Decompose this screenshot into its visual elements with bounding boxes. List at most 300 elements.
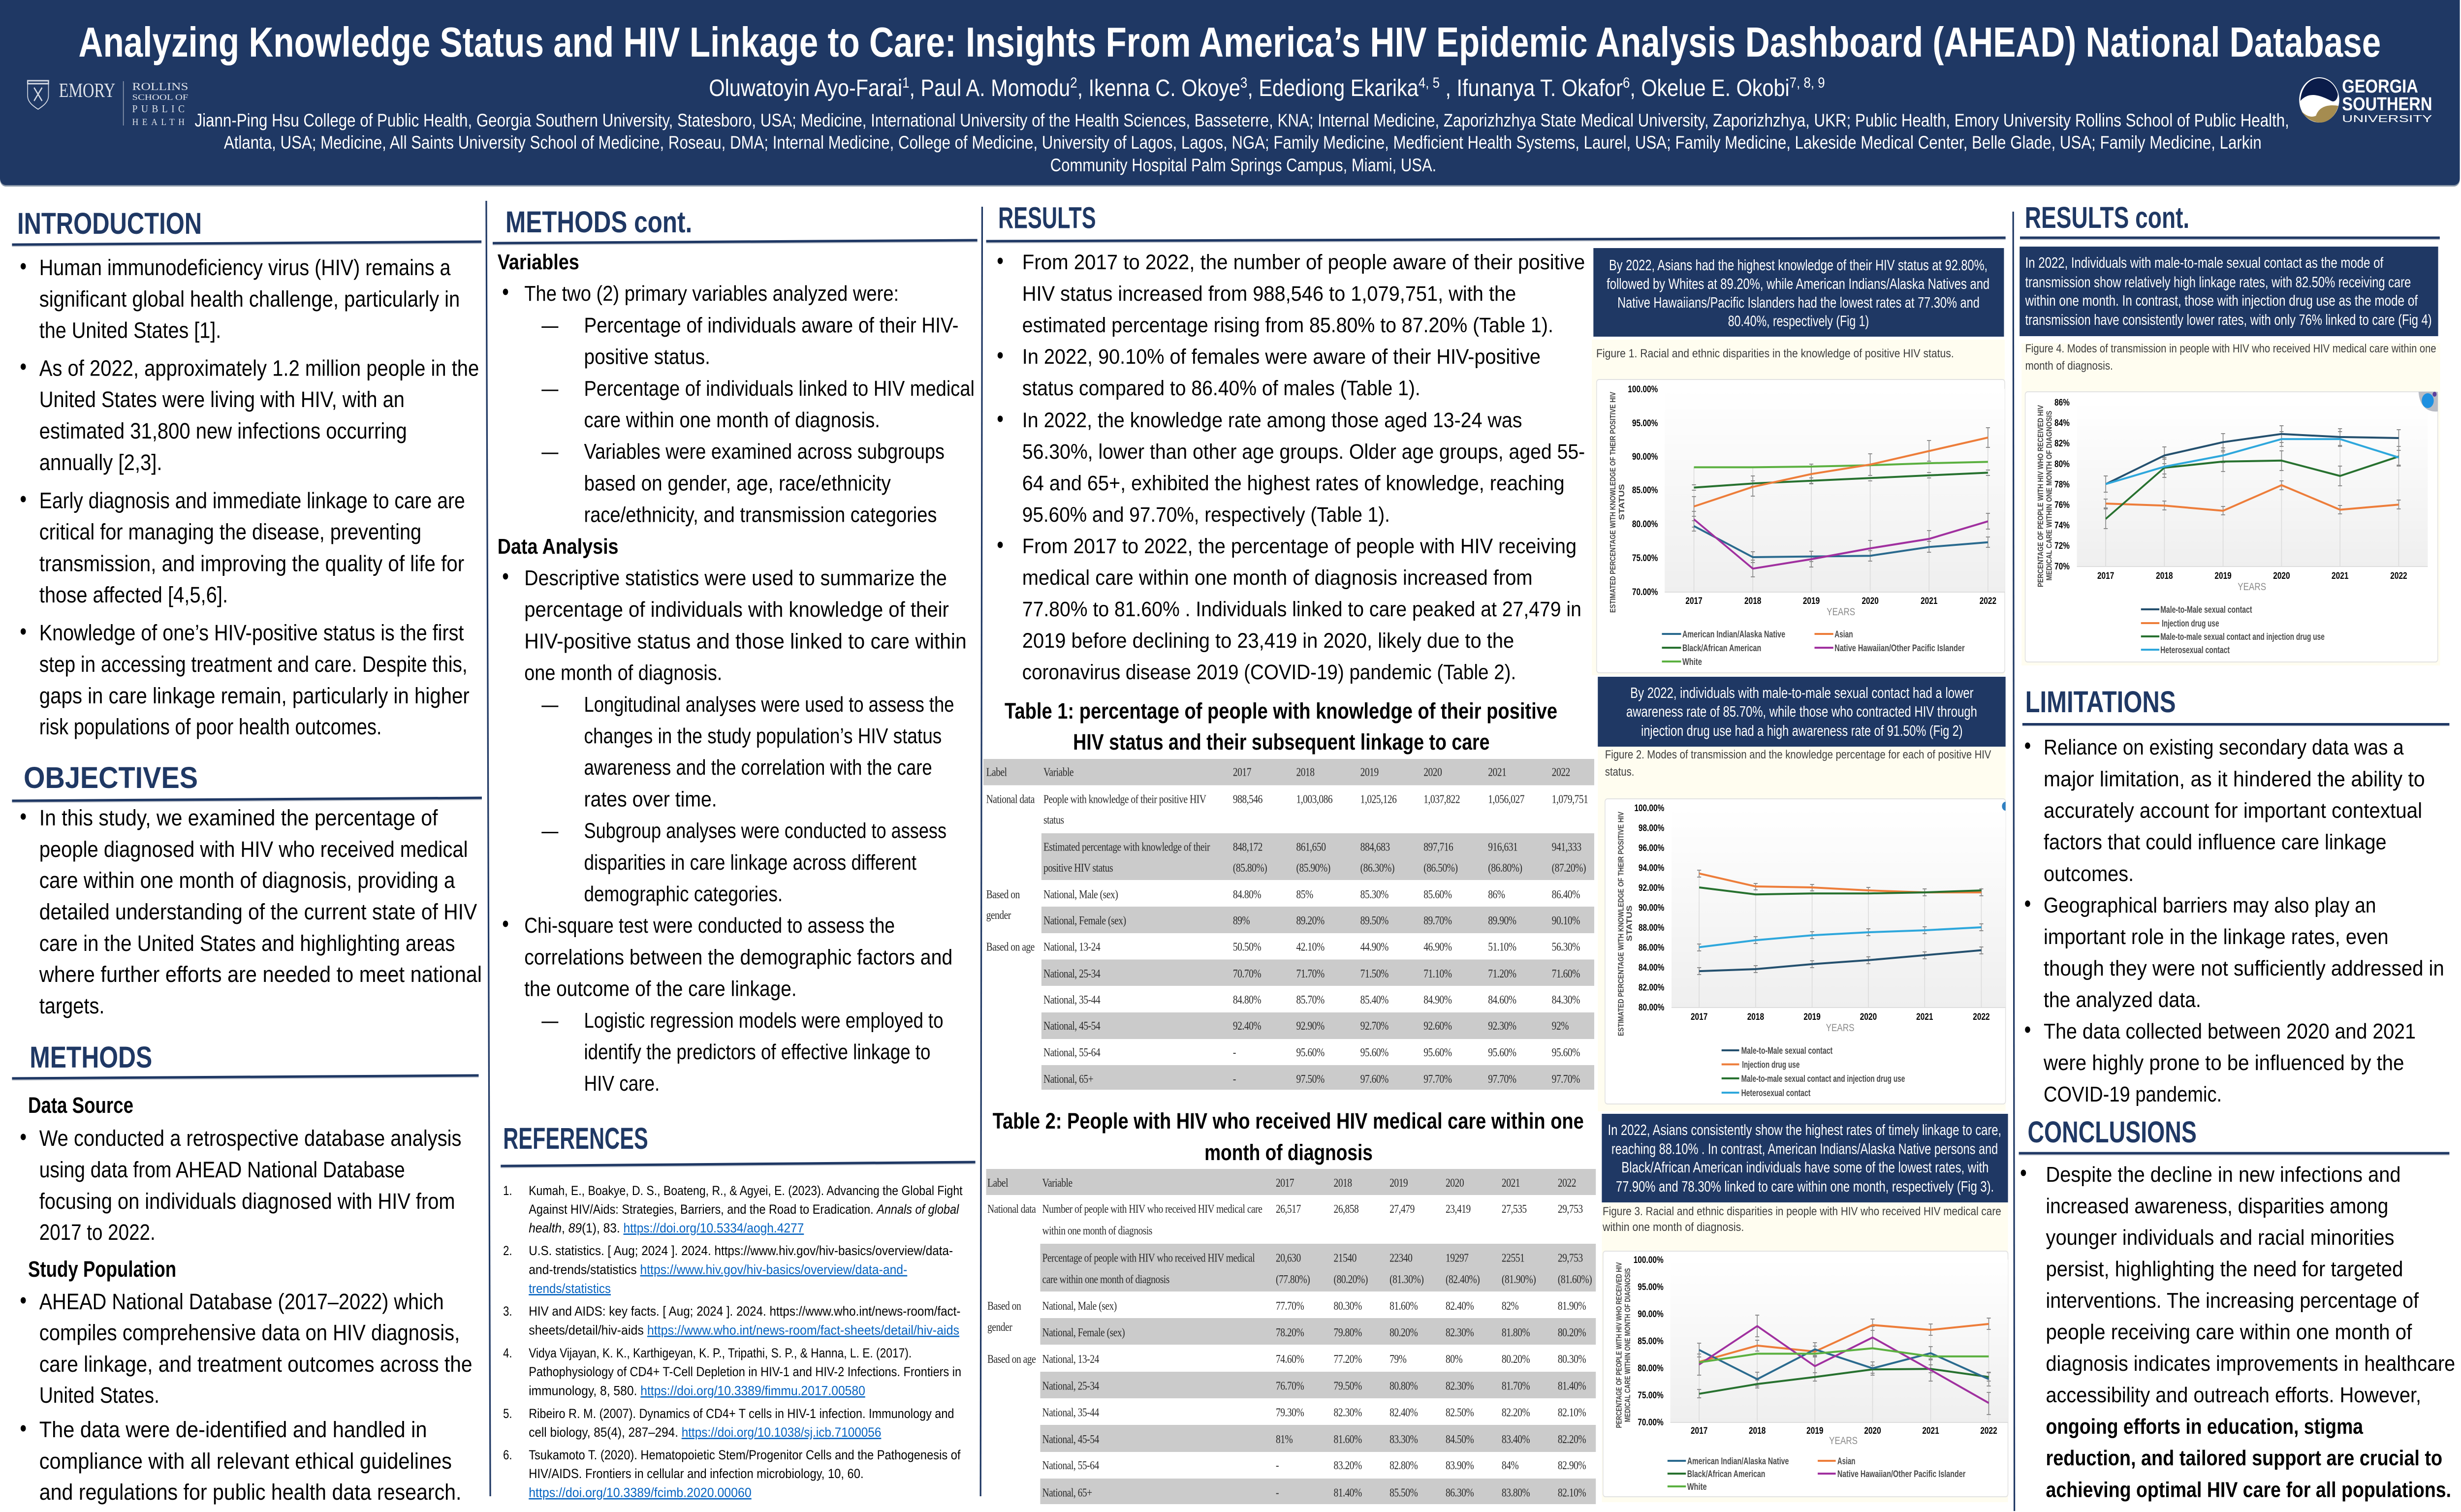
table 2: National, 45-54: [1042, 1433, 1099, 1446]
table 1: 56.30%: [1552, 941, 1580, 953]
table 1: 861,650: [1296, 841, 1326, 853]
title: Analyzing Knowledge Status and HIV Linkage to Care: Insights From America’s HIV Epidemic Analysis Dashboard (AHEAD) National Database: [79, 19, 2381, 66]
heading: introduction: INTRODUCTION: [17, 207, 202, 240]
icon: blue marker: [2002, 802, 2006, 811]
table 2: 74.60%: [1276, 1353, 1304, 1365]
line chart: figure 1: 90.00%: [1632, 451, 1658, 462]
text: reference list: cell biology, 85(4), 287–294. https://doi.org/10.1038/sj.icb.7100056: [529, 1425, 881, 1440]
table 2 title: [993, 1108, 1584, 1165]
line chart: figure 1: 70.00%: [1632, 586, 1658, 597]
text: introduction bullets: those affected [4,5,6].: [39, 582, 228, 607]
panel: limitations: [2022, 685, 2449, 1106]
table 1: status: [1043, 814, 1064, 826]
line chart: figure 3: [1614, 1254, 2008, 1447]
table 2: 81%: [1276, 1433, 1293, 1446]
table 1: 84.30%: [1552, 993, 1580, 1006]
line chart: figure 1: 75.00%: [1632, 552, 1658, 563]
text: data source: [21, 1093, 461, 1245]
text: limitations bullets: outcomes.: [2044, 862, 2134, 886]
authors: Oluwatoyin Ayo-Farai: [709, 75, 891, 101]
table 1: 89%: [1233, 914, 1250, 927]
table 2: (77.80%): [1276, 1273, 1310, 1286]
text: data analysis: –: [541, 1008, 559, 1033]
text: reference list: Kumah, E., Boakye, D. S., Boateng, R., & Agyei, E. (2023). Advancing the Global Fight: [529, 1184, 963, 1198]
table 1: 86%: [1488, 888, 1505, 901]
table 2: 2021: [1502, 1176, 1520, 1189]
legend: figure 3: Native Hawaiian/Other Pacific Islander: [1837, 1468, 1966, 1479]
table 2: 2019: [1389, 1176, 1408, 1189]
text: results bullets: 64 and 65+, exhibited the highest rates of knowledge, reaching: [1022, 472, 1565, 495]
text: reference list: trends/statistics: [529, 1282, 611, 1296]
legend: figure 3: Asian: [1837, 1455, 1856, 1466]
table 1: National data: [986, 793, 1035, 806]
line chart: figure 2: YEARS: [1826, 1022, 1855, 1034]
line chart: figure 2: 84.00%: [1639, 962, 1664, 973]
table 2 title: month of diagnosis: [1204, 1140, 1373, 1165]
text: study population: United States.: [39, 1383, 159, 1408]
text: limitations bullets: Reliance on existing secondary data was a: [2044, 736, 2404, 759]
legend: figure 2: Injection drug use: [1742, 1059, 1800, 1070]
text: reference list: sheets/detail/hiv-aids https://www.who.int/news-room/fact-sheets/detail/hiv-aids: [529, 1323, 959, 1338]
table 1: 84.80%: [1233, 888, 1261, 901]
logo: Georgia Southern University: GEORGIA: [2342, 76, 2418, 97]
callout: figure 1 finding: followed by Whites at 89.20%, while American Indians/Alaska Natives and: [1607, 275, 1989, 292]
table 2: 80.30%: [1334, 1299, 1362, 1312]
table 2: 2017: [1276, 1176, 1294, 1189]
callout: figure 2 finding: By 2022, individuals with male-to-male sexual contact had a lower: [1630, 684, 1974, 701]
table 2: Based on: [987, 1299, 1021, 1312]
text: data analysis: [498, 535, 967, 1096]
text: study population: compliance with all relevant ethical guidelines: [39, 1449, 452, 1474]
text: reference list: [503, 1184, 963, 1500]
callout: figure 3 finding: [1602, 1114, 2008, 1202]
legend: figure 2: Male-to-Male sexual contact: [1741, 1045, 1832, 1056]
caption: figure 3: within one month of diagnosis.: [1602, 1220, 1744, 1233]
table 1: [983, 759, 1594, 1090]
table 1: 50.50%: [1233, 941, 1261, 953]
text: data analysis: disparities in care linkage across different: [584, 850, 916, 875]
line chart: figure 2: 92.00%: [1639, 882, 1664, 893]
table 2: 29,753: [1558, 1252, 1583, 1264]
caption: figure 2: Figure 2. Modes of transmission and the knowledge percentage for each of positive HIV: [1605, 748, 1991, 761]
table 1: 85.70%: [1296, 993, 1325, 1006]
line chart: figure 1: YEARS: [1827, 606, 1855, 618]
text: results bullets: estimated percentage rising from 85.80% to 87.20% (Table 1).: [1022, 314, 1553, 337]
line chart: figure 3: 70.00%: [1638, 1417, 1664, 1427]
line chart: figure 4: 2021: [2332, 570, 2349, 581]
text: limitations bullets: [2025, 736, 2444, 1106]
table 2: 27,479: [1389, 1202, 1415, 1215]
table 2 title: Table 2: People with HIV who received HIV medical care within one: [993, 1108, 1584, 1134]
table 1: 84.60%: [1488, 993, 1516, 1006]
table 1: 71.10%: [1423, 967, 1452, 980]
text: introduction bullets: step in accessing treatment and care. Despite this,: [39, 652, 468, 677]
line chart: figure 3: YEARS: [1829, 1435, 1858, 1447]
callout: figure 4 finding: In 2022, Individuals with male-to-male sexual contact as the mode of: [2025, 254, 2384, 271]
text: data analysis: percentage of individuals with knowledge of their: [524, 598, 949, 622]
text: reference list: 2.: [503, 1244, 512, 1259]
line chart: figure 4: [2036, 397, 2428, 593]
line chart: figure 3: PERCENTAGE OF PEOPLE WITH HIV WHO RECEIVED HIV: [1614, 1262, 1623, 1428]
table 1: 95.60%: [1552, 1046, 1580, 1059]
affiliations: [195, 110, 2289, 176]
table 2: 83.80%: [1502, 1486, 1530, 1499]
table 2: 82.50%: [1446, 1406, 1474, 1419]
table 2: 79.30%: [1276, 1406, 1304, 1419]
table 1: 89.20%: [1296, 914, 1325, 927]
text: reference list: 3.: [503, 1304, 512, 1319]
table 1: National, Male (sex): [1043, 888, 1118, 901]
line chart: figure 2: 94.00%: [1639, 862, 1664, 873]
table 2: 84%: [1502, 1459, 1519, 1472]
authors: 1: [902, 74, 909, 91]
callout: figure 2 finding: [1598, 677, 2006, 747]
line chart: figure 3: 2021: [1922, 1425, 1939, 1436]
table 1: 916,631: [1488, 841, 1517, 853]
line chart: figure 2: 2019: [1803, 1011, 1821, 1022]
table 2: 22551: [1502, 1252, 1524, 1264]
table 1: (86.50%): [1423, 861, 1458, 874]
table 2: 80.20%: [1558, 1326, 1586, 1339]
table 2: 80%: [1446, 1353, 1463, 1365]
text: variables: Variables: [498, 251, 579, 274]
text: limitations bullets: Geographical barriers may also play an: [2044, 894, 2376, 917]
panel: references: [501, 1122, 976, 1500]
legend: figure 2: Male-to-male sexual contact and injection drug use: [1741, 1073, 1905, 1084]
table 2: 82.30%: [1446, 1380, 1474, 1392]
table 1: 2018: [1296, 766, 1315, 779]
table 2: 83.20%: [1334, 1459, 1362, 1472]
table 2: 82.30%: [1334, 1406, 1362, 1419]
table 1: positive HIV status: [1043, 861, 1113, 874]
line chart: figure 1: 2020: [1862, 595, 1879, 606]
logo: Emory Rollins School of Public Health: HEALTH: [132, 117, 188, 127]
logo: Emory Rollins School of Public Health: EMORY: [59, 80, 115, 102]
authors: 4, 5: [1419, 74, 1440, 91]
text: objectives bullet: care within one month of diagnosis, providing a: [39, 868, 455, 893]
authors: , Ikenna C. Okoye: [1077, 75, 1240, 101]
table 2: 80.20%: [1502, 1353, 1530, 1365]
text: data analysis: Descriptive statistics were used to summarize the: [524, 567, 947, 590]
callout: figure 3 finding: In 2022, Asians consistently show the highest rates of timely linkage to care,: [1608, 1121, 2001, 1138]
text: data analysis: Chi-square test were conducted to assess the: [524, 914, 895, 938]
table 1: 92.90%: [1296, 1019, 1325, 1032]
text: results bullets: coronavirus disease 2019 (COVID-19) pandemic (Table 2).: [1022, 661, 1516, 684]
text: reference list: health , 89(1), 83. https://doi.org/10.5334/aogh.4277: [529, 1221, 804, 1236]
caption: figure 1: Figure 1. Racial and ethnic disparities in the knowledge of positive HIV status.: [1596, 346, 1954, 360]
text: reference list: Tsukamoto T. (2020). Hematopoietic Stem/Progenitor Cells and the Pathogenesis of: [529, 1448, 961, 1463]
legend: figure 2: [1722, 1045, 1905, 1098]
table 2: care within one month of diagnosis: [1042, 1273, 1169, 1286]
text: limitations bullets: were highly prone to be influenced by the: [2043, 1051, 2404, 1075]
table 1: 2019: [1360, 766, 1379, 779]
panel: conclusions: [2019, 1115, 2455, 1502]
text: objectives bullet: where further efforts are needed to meet national: [39, 962, 482, 987]
text: conclusions bullet: diagnosis indicates improvements in healthcare: [2046, 1352, 2455, 1376]
table 2: National, 25-34: [1042, 1380, 1099, 1392]
table 1: (87.20%): [1552, 861, 1586, 874]
table 1: 848,172: [1233, 841, 1262, 853]
table 2: gender: [987, 1321, 1012, 1333]
heading: results cont.: RESULTS cont.: [2025, 201, 2189, 234]
panel: figure 3: [1602, 1202, 2008, 1502]
rule: results cont.: [2020, 238, 2440, 239]
panel: introduction: [12, 207, 481, 739]
panel: methods: [12, 1040, 478, 1505]
text: data analysis: Logistic regression models were employed to: [584, 1008, 944, 1033]
text: variables: –: [541, 314, 559, 337]
table 2: 21540: [1334, 1252, 1357, 1264]
table 2: (81.90%): [1502, 1273, 1536, 1286]
text: results bullets: From 2017 to 2022, the percentage of people with HIV receiving: [1022, 535, 1577, 558]
table 1: 71.50%: [1360, 967, 1388, 980]
table 1: National, 45-54: [1043, 1019, 1101, 1032]
table 1: 46.90%: [1423, 941, 1452, 953]
legend: figure 2: Heterosexual contact: [1741, 1087, 1811, 1098]
text: results bullets: 56.30%, lower than other age groups. Older age groups, aged 55-: [1022, 441, 1585, 464]
table 2: -: [1276, 1486, 1279, 1499]
logo: Emory Rollins School of Public Health: [28, 80, 189, 127]
table 1: 1,056,027: [1488, 793, 1525, 806]
text: reference list: 4.: [503, 1346, 512, 1361]
line chart: figure 1: 95.00%: [1632, 417, 1658, 428]
table 1: 97.70%: [1488, 1072, 1516, 1085]
text: variables: The two (2) primary variables analyzed were:: [524, 282, 899, 306]
table 2: 2018: [1334, 1176, 1352, 1189]
text: conclusions bullet: increased awareness, disparities among: [2046, 1195, 2388, 1218]
table 1: 90.10%: [1552, 914, 1580, 927]
table 1: gender: [986, 909, 1011, 921]
table 2: 79%: [1389, 1353, 1407, 1365]
table 2: 20,630: [1276, 1252, 1301, 1264]
line chart: figure 3: 90.00%: [1638, 1308, 1664, 1319]
authors: , Paul A. Momodu: [909, 75, 1070, 101]
table 1 title: Table 1: percentage of people with knowledge of their positive: [1005, 698, 1557, 724]
table 2: -: [1276, 1459, 1279, 1472]
table 1: National, 65+: [1043, 1072, 1093, 1085]
table 2: National, 13-24: [1042, 1353, 1099, 1365]
line chart: figure 2: ESTIMATED PERCENTAGE WITH KNOWLEDGE OF THEIR POSITIVE HIV: [1616, 812, 1625, 1036]
text: introduction bullets: transmission, and improving the quality of life for: [39, 551, 464, 576]
line chart: figure 4: 2017: [2097, 570, 2114, 581]
table 1: 89.70%: [1423, 914, 1452, 927]
table 2: 27,535: [1502, 1202, 1527, 1215]
text: objectives bullet: people diagnosed with HIV who received medical: [39, 837, 468, 862]
legend: figure 4: [2141, 604, 2325, 655]
table 1: 84.80%: [1233, 993, 1261, 1006]
table 1: 884,683: [1360, 841, 1390, 853]
line chart: figure 2: 80.00%: [1639, 1002, 1664, 1012]
text: conclusions bullet: people receiving care within one month of: [2046, 1321, 2412, 1344]
table 1: 92%: [1552, 1019, 1569, 1032]
logo: Emory Rollins School of Public Health: ROLLINS: [132, 81, 188, 93]
text: reference list: Ribeiro R. M. (2007). Dynamics of CD4+ T cells in HIV-1 infection. Immunology and: [529, 1407, 954, 1421]
table 2: 82.40%: [1446, 1299, 1474, 1312]
text: results bullets: HIV status increased from 988,546 to 1,079,751, with the: [1022, 283, 1516, 306]
table 2: Based on age: [987, 1353, 1036, 1365]
text: results bullets: status compared to 86.40% of males (Table 1).: [1022, 377, 1420, 400]
line chart: figure 1: 2019: [1803, 595, 1820, 606]
table 2: Variable: [1042, 1176, 1073, 1189]
table 2: within one month of diagnosis: [1042, 1224, 1152, 1237]
line chart: figure 2: 2020: [1860, 1011, 1877, 1022]
caption: figure 4: month of diagnosis.: [2025, 359, 2113, 373]
table 2: 81.70%: [1502, 1380, 1530, 1392]
line chart: figure 1: 2018: [1744, 595, 1762, 606]
line chart: figure 2: 2021: [1916, 1011, 1933, 1022]
heading: methods: METHODS: [30, 1040, 152, 1074]
table 1: 89.90%: [1488, 914, 1516, 927]
table 2: 22340: [1389, 1252, 1413, 1264]
authors: 6: [1623, 74, 1630, 91]
table 2: (81.30%): [1389, 1273, 1424, 1286]
table 2: 80.20%: [1389, 1326, 1418, 1339]
text: variables: [498, 251, 975, 527]
text: variables: based on gender, age, race/ethnicity: [584, 472, 891, 495]
line chart: figure 1: ESTIMATED PERCENTAGE WITH KNOWLEDGE OF THEIR POSITIVE HIV: [1609, 392, 1617, 613]
affiliations: Jiann-Ping Hsu College of Public Health, Georgia Southern University, Statesboro, USA; Medicine, International University of the Health Sciences, Basseterre, KNA; Internal Medicine, Zaporizhzhya State Medical University, Zaporizhzhya, UKR; Public Health, Emory University Rollins School of Public Health,: [195, 110, 2289, 131]
legend: figure 1: White: [1682, 656, 1702, 667]
table 1: 92.70%: [1360, 1019, 1388, 1032]
line chart: figure 1: 2022: [1980, 595, 1996, 606]
table 2: 82.30%: [1446, 1326, 1474, 1339]
text: data analysis: demographic categories.: [584, 882, 783, 906]
line chart: figure 4: PERCENTAGE OF PEOPLE WITH HIV WHO RECEIVED HIV: [2036, 405, 2045, 587]
text: reference list: Against HIV/Aids: Strategies, Barriers, and the Road to Eradication. Annals of global: [529, 1202, 960, 1217]
text: limitations bullets: the analyzed data.: [2044, 988, 2201, 1012]
table 2: 81.80%: [1502, 1326, 1530, 1339]
table 1: 44.90%: [1360, 941, 1388, 953]
text: variables: Percentage of individuals aware of their HIV-: [584, 314, 958, 337]
table 2: Number of people with HIV who received HIV medical care: [1042, 1202, 1262, 1215]
text: data source: We conducted a retrospective database analysis: [39, 1126, 462, 1151]
text: limitations bullets: though they were not sufficiently addressed in: [2044, 957, 2444, 980]
table 2: 79.80%: [1334, 1326, 1362, 1339]
text: variables: Variables were examined across subgroups: [584, 440, 945, 464]
text: variables: –: [541, 440, 559, 464]
table 1: 95.60%: [1423, 1046, 1452, 1059]
table 1: National, 25-34: [1043, 967, 1101, 980]
callout: figure 2 finding: injection drug use had a high awareness rate of 91.50% (Fig 2): [1641, 722, 1963, 739]
text: objectives bullet: detailed understanding of the current state of HIV: [39, 899, 477, 924]
legend: figure 1: Black/African American: [1682, 642, 1761, 653]
table 1: 85%: [1296, 888, 1313, 901]
text: reference list: 6.: [503, 1448, 512, 1463]
table 2: Percentage of people with HIV who received HIV medical: [1042, 1252, 1255, 1264]
line chart: figure 4: 80%: [2054, 458, 2070, 469]
table 1: 84.90%: [1423, 993, 1452, 1006]
table 2: 82.40%: [1389, 1406, 1418, 1419]
text: variables: race/ethnicity, and transmission categories: [584, 503, 937, 527]
text: reference list: Vidya Vijayan, K. K., Karthigeyan, K. P., Tripathi, S. P., & Hanna, L. E. (2017).: [529, 1346, 912, 1361]
callout: figure 1 finding: By 2022, Asians had the highest knowledge of their HIV status at 92.80%,: [1609, 256, 1988, 274]
header banner: [0, 0, 2460, 187]
callout: figure 3 finding: 77.90% and 78.30% linked to care within one month, respectively (Fig 3).: [1616, 1177, 1994, 1195]
text: objectives bullet: [21, 805, 482, 1018]
text: reference list: HIV/AIDS. Frontiers in cellular and infection microbiology, 10, 60.: [529, 1467, 864, 1481]
table 2: 79.50%: [1334, 1380, 1362, 1392]
text: data analysis: Data Analysis: [498, 535, 619, 559]
table 2: 82.80%: [1389, 1459, 1418, 1472]
legend: figure 3: American Indian/Alaska Native: [1687, 1455, 1789, 1466]
text: variables: –: [541, 377, 559, 401]
table 2: 82.90%: [1558, 1459, 1586, 1472]
table 2: 23,419: [1446, 1202, 1471, 1215]
table 1: 95.60%: [1296, 1046, 1325, 1059]
authors: , Edediong Ekarika: [1247, 75, 1419, 101]
table 1: 97.70%: [1552, 1072, 1580, 1085]
line chart: figure 4: 2022: [2390, 570, 2407, 581]
legend: figure 4: Male-to-male sexual contact and injection drug use: [2160, 631, 2325, 642]
table 2: 81.60%: [1389, 1299, 1418, 1312]
authors: 7, 8, 9: [1790, 74, 1825, 91]
text: data analysis: one month of diagnosis.: [524, 661, 722, 685]
column dividers: [486, 201, 2015, 1511]
table 2: 77.70%: [1276, 1299, 1304, 1312]
table 2: 81.90%: [1558, 1299, 1586, 1312]
table 2: 82.10%: [1558, 1406, 1586, 1419]
table 2: 80.80%: [1389, 1380, 1418, 1392]
text: conclusions bullet: younger individuals and racial minorities: [2046, 1226, 2395, 1250]
caption: figure 3: [1602, 1204, 2001, 1233]
text: introduction bullets: Human immunodeficiency virus (HIV) remains a: [39, 255, 451, 280]
text: conclusions bullet: accessibility and outreach efforts. However,: [2046, 1384, 2421, 1407]
text: study population: AHEAD National Database (2017–2022) which: [39, 1289, 444, 1314]
table 1: 95.60%: [1360, 1046, 1388, 1059]
text: results bullets: In 2022, 90.10% of females were aware of their HIV-positive: [1022, 346, 1541, 369]
text: data analysis: Subgroup analyses were conducted to assess: [584, 819, 947, 843]
text: study population: care linkage, and treatment outcomes across the: [39, 1352, 472, 1377]
table 2: 77.20%: [1334, 1353, 1362, 1365]
line chart: figure 4: 78%: [2054, 479, 2070, 490]
table 1: 51.10%: [1488, 941, 1516, 953]
authors: , Okelue E. Okobi: [1630, 75, 1790, 101]
line chart: figure 4: 2020: [2273, 570, 2290, 581]
legend: figure 3: Black/African American: [1687, 1468, 1765, 1479]
line chart: figure 2: 90.00%: [1639, 902, 1664, 913]
table 2: 83.90%: [1446, 1459, 1474, 1472]
table 1: -: [1233, 1072, 1236, 1085]
text: variables: care within one month of diagnosis.: [584, 409, 880, 432]
panel: figure 2: [1598, 747, 2006, 1111]
table 2: 26,517: [1276, 1202, 1301, 1215]
table 2: 2020: [1446, 1176, 1464, 1189]
text: conclusions bullet: [2021, 1163, 2455, 1502]
affiliations: Atlanta, USA; Medicine, All Saints University School of Medicine, Roseau, DMA; Internal Medicine, College of Medicine, University of Lagos, Lagos, NGA; Family Medicine, Medficient Health Systems, Laurel, USA; Family Medicine, Lakeside Medical Center, Belle Glade, USA; Family Medicine, Larkin: [224, 132, 2262, 153]
line chart: figure 4: 86%: [2054, 397, 2070, 408]
text: data source: focusing on individuals diagnosed with HIV from: [39, 1189, 455, 1214]
text: variables: Percentage of individuals linked to HIV medical: [584, 377, 975, 401]
table 1: 1,025,126: [1360, 793, 1397, 806]
line chart: figure 2: 2022: [1973, 1011, 1990, 1022]
text: introduction bullets: gaps in care linkage remain, particularly in higher: [39, 683, 470, 708]
table 1: People with knowledge of their positive HIV: [1043, 793, 1206, 806]
line chart: figure 1: 2021: [1921, 595, 1938, 606]
text: conclusions bullet: interventions. The increasing percentage of: [2046, 1289, 2419, 1313]
line chart: figure 3: 80.00%: [1638, 1362, 1664, 1373]
text: results bullets: In 2022, the knowledge rate among those aged 13-24 was: [1022, 409, 1522, 432]
text: introduction bullets: [21, 255, 479, 739]
table 1: 2022: [1552, 766, 1570, 779]
text: introduction bullets: Knowledge of one’s HIV-positive status is the first: [39, 620, 464, 645]
text: introduction bullets: significant global health challenge, particularly in: [39, 286, 460, 312]
text: data analysis: changes in the study population’s HIV status: [584, 724, 942, 748]
callout: figure 3 finding: Black/African American individuals have some of the lowest rates, with: [1621, 1158, 1989, 1176]
legend: figure 1: Native Hawaiian/Other Pacific Islander: [1834, 642, 1965, 653]
text: limitations bullets: The data collected between 2020 and 2021: [2044, 1020, 2416, 1043]
table 1: (86.30%): [1360, 861, 1394, 874]
line chart: figure 2: 100.00%: [1634, 802, 1664, 813]
